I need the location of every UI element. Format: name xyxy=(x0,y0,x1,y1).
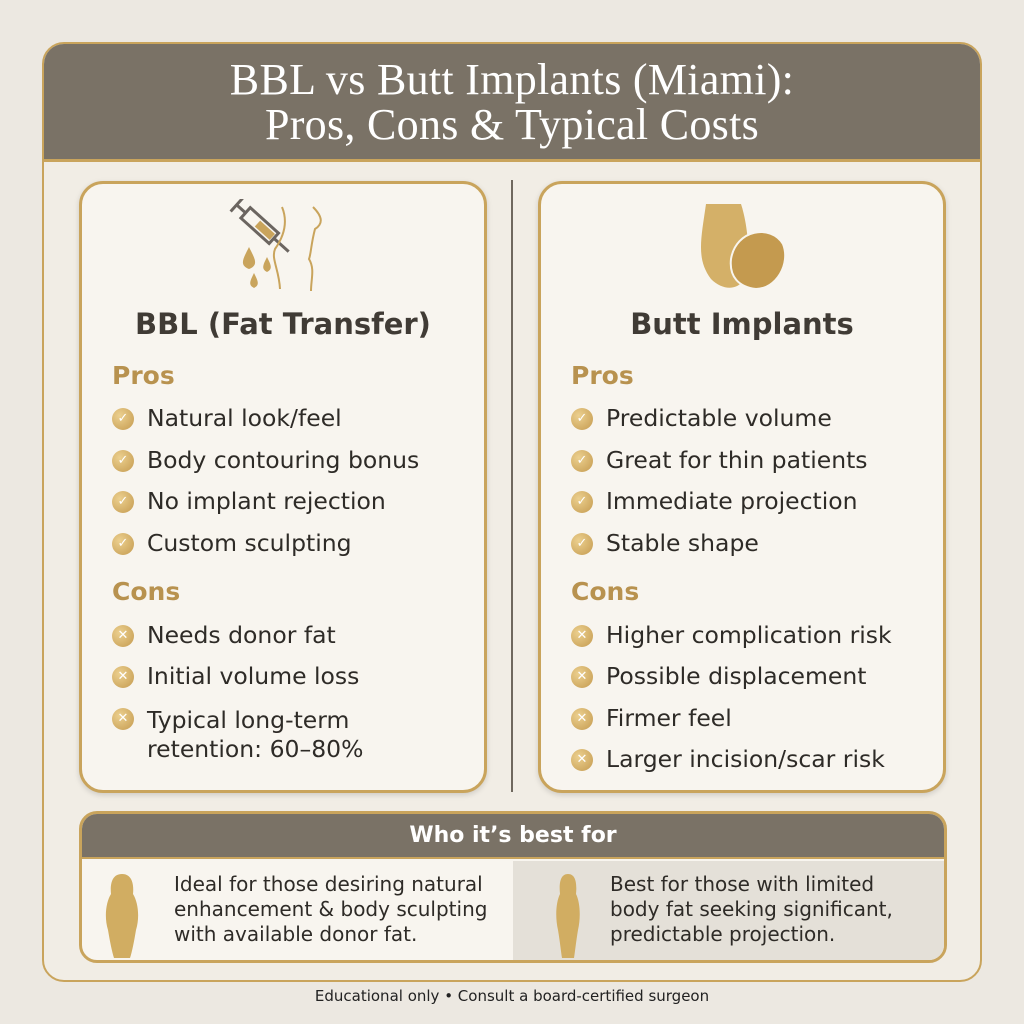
panel: BBL: No implant rejection xyxy=(147,487,386,515)
icon: woman figure left xyxy=(106,874,138,958)
footer: Educational only • Consult a board-certified surgeon xyxy=(315,987,709,1005)
panel: implants: ✕ xyxy=(577,711,587,726)
panel: implants: ✓ xyxy=(577,411,587,426)
panel: implants: ✓ xyxy=(577,494,587,509)
heading: Who it’s best for xyxy=(409,823,617,848)
text left: enhancement & body sculpting xyxy=(174,897,487,921)
panel: BBL: ✓ xyxy=(118,536,128,551)
text left: with available donor fat. xyxy=(174,922,417,946)
panel: implants: Great for thin patients xyxy=(606,446,868,474)
divider xyxy=(511,180,513,792)
panel: implants xyxy=(538,181,946,793)
pros: Pros xyxy=(112,361,175,390)
text right: Best for those with limited xyxy=(610,872,874,896)
icon: syringe and body xyxy=(230,199,322,291)
panel: BBL: Initial volume loss xyxy=(147,662,359,690)
panel: BBL: Natural look/feel xyxy=(147,404,342,432)
panel: BBL: Typical long-term xyxy=(147,706,349,734)
panel: BBL: ✓ xyxy=(118,494,128,509)
panel: BBL: Custom sculpting xyxy=(147,529,352,557)
panel: BBL: retention: 60–80% xyxy=(147,735,363,763)
panel: BBL: ✕ xyxy=(118,628,128,643)
panel: BBL: Body contouring bonus xyxy=(147,446,419,474)
panel: implants: Immediate projection xyxy=(606,487,858,515)
icon: buttock implant xyxy=(701,204,784,288)
panel: BBL: ✕ xyxy=(118,711,128,726)
panel: BBL: ✓ xyxy=(118,411,128,426)
title: Pros, Cons & Typical Costs xyxy=(265,100,759,149)
panel: implants: Predictable volume xyxy=(606,404,832,432)
text left xyxy=(174,872,487,946)
panel: implants: ✕ xyxy=(577,669,587,684)
text right: body fat seeking significant, xyxy=(610,897,893,921)
title xyxy=(44,44,980,162)
text right: predictable projection. xyxy=(610,922,835,946)
panel: implants: Firmer feel xyxy=(606,704,732,732)
panel: implants: Possible displacement xyxy=(606,662,866,690)
icon: woman figure right xyxy=(556,874,580,958)
panel: implants: Higher complication risk xyxy=(606,621,892,649)
text right xyxy=(610,872,893,946)
heading: BBL (Fat Transfer) xyxy=(135,307,431,341)
panel: BBL: ✓ xyxy=(118,453,128,468)
panel: implants: Larger incision/scar risk xyxy=(606,745,885,773)
cons: Cons xyxy=(112,577,180,606)
panel: implants: ✓ xyxy=(577,453,587,468)
panel: BBL xyxy=(79,181,487,793)
title: BBL vs Butt Implants (Miami): xyxy=(230,55,794,104)
panel: implants: ✓ xyxy=(577,536,587,551)
text left: Ideal for those desiring natural xyxy=(174,872,483,896)
panel: implants: ✕ xyxy=(577,752,587,767)
panel: BBL: Needs donor fat xyxy=(147,621,336,649)
panel: implants: ✕ xyxy=(577,628,587,643)
pros: Pros xyxy=(571,361,634,390)
panel: implants: Stable shape xyxy=(606,529,759,557)
panel: who it's best for xyxy=(79,811,947,963)
heading: Butt Implants xyxy=(630,307,854,341)
cons: Cons xyxy=(571,577,639,606)
panel: BBL: ✕ xyxy=(118,669,128,684)
heading xyxy=(82,814,944,859)
